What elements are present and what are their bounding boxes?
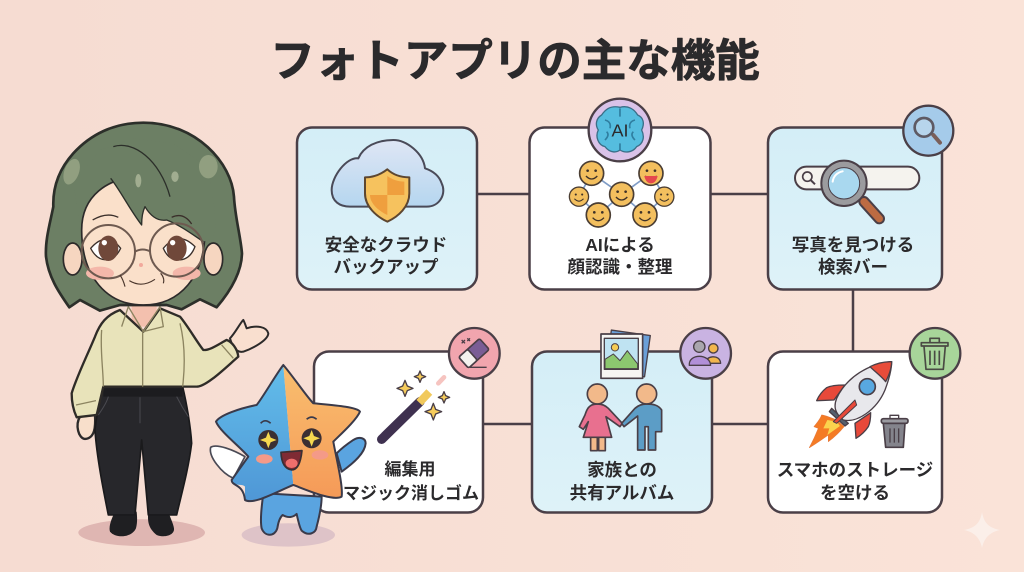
character: star mascot [210,365,366,547]
card background [297,128,477,290]
panel: cloud backup [297,128,477,290]
card background [530,128,710,290]
character: woman with glasses [46,123,268,546]
label: を空ける [820,483,890,503]
panel: AI face recognition [530,99,710,290]
icon: family holding hands [579,384,662,451]
label: スマホのストレージ [777,460,933,480]
panel: free up storage [768,328,960,512]
panel: magic eraser [314,328,500,512]
badge: AI brain: AI [611,121,628,141]
icon: search bar with magnifier [795,161,919,219]
card background [532,352,712,512]
badge: magnifier [903,106,953,156]
icon: rocket [809,362,892,448]
label: バックアップ [334,257,439,277]
icon: sparkle watermark [964,512,1000,548]
panel: shared album [532,328,731,512]
connector lines [477,194,853,424]
icon: small trash can [881,415,908,447]
card background [314,352,483,512]
icon: cloud with shield [332,140,443,222]
label: 家族との [587,460,657,480]
label: マジック消しゴム [343,483,479,503]
label: 編集用 [384,460,436,479]
label: AIによる [585,235,655,255]
title: フォトアプリの主な機能 [270,37,760,86]
label: 顔認識・整理 [568,257,673,277]
badge: eraser [449,328,500,379]
label: 写真を見つける [792,235,914,255]
label: 安全なクラウド [325,235,447,255]
icon: photo stack [601,330,650,378]
icon: connected faces [569,161,674,227]
card background [768,128,942,290]
badge: AI brain [589,99,651,161]
badge: people [680,328,731,379]
label: 共有アルバム [570,483,674,503]
panel: search bar [768,106,953,290]
label: 検索バー [818,257,888,277]
icon: magic wand [382,371,450,439]
badge: trash can [910,328,960,379]
card background [768,352,942,512]
